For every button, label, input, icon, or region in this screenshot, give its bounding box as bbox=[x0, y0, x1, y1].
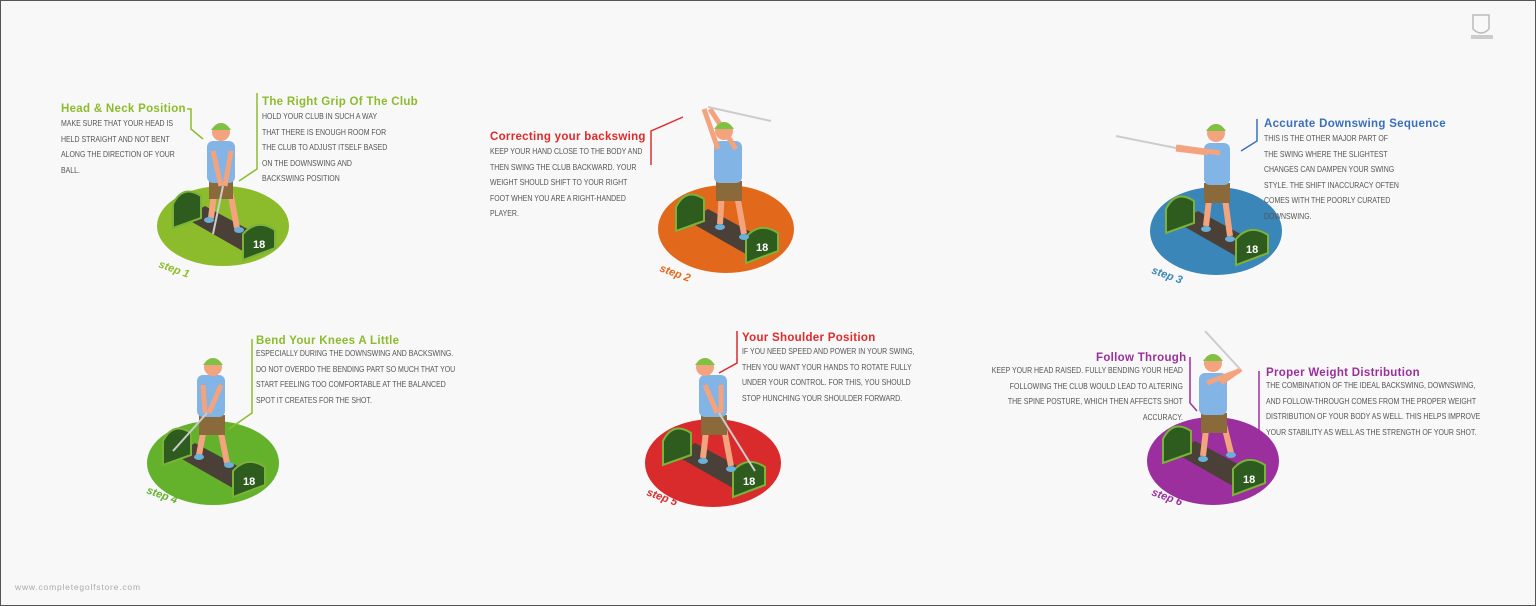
leader lines bbox=[187, 93, 1259, 435]
text: STOP HUNCHING YOUR SHOULDER FORWARD. bbox=[742, 394, 902, 402]
text: DOWNSWING. bbox=[1264, 212, 1312, 220]
footer url: www.completegolfstore.com bbox=[15, 582, 141, 592]
scene: step 1 bbox=[157, 123, 289, 266]
text: backswing: Correcting your backswing bbox=[490, 131, 646, 143]
scene: step 3: 18 bbox=[1246, 244, 1258, 256]
scene: step 1: 18 bbox=[253, 239, 265, 251]
text: UNDER YOUR CONTROL. FOR THIS, YOU SHOULD bbox=[742, 378, 911, 387]
text: THE SPINE POSTURE, WHICH THEN AFFECTS SHOT bbox=[1008, 397, 1183, 406]
text: FOLLOWING THE CLUB WOULD LEAD TO ALTERING bbox=[1010, 382, 1183, 390]
text: THIS IS THE OTHER MAJOR PART OF bbox=[1264, 134, 1388, 143]
text: THE COMBINATION OF THE IDEAL BACKSWING, DOWNSWING, bbox=[1266, 381, 1475, 390]
text: downswing: Accurate Downswing Sequence bbox=[1264, 118, 1446, 130]
scene: step 4 bbox=[147, 358, 279, 505]
text: head & neck: Head & Neck Position bbox=[61, 103, 186, 115]
scene: step 5: 18 bbox=[743, 476, 755, 488]
text: MAKE SURE THAT YOUR HEAD IS bbox=[61, 119, 173, 128]
text: COMES WITH THE POORLY CURATED bbox=[1264, 196, 1390, 205]
text: THEN SWING THE CLUB BACKWARD. YOUR bbox=[490, 162, 636, 172]
text: THE CLUB TO ADJUST ITSELF BASED bbox=[262, 143, 387, 152]
step labels: step 4 bbox=[145, 485, 179, 507]
step labels: step 5 bbox=[645, 487, 680, 509]
text: STYLE. THE SHIFT INACCURACY OFTEN bbox=[1264, 180, 1399, 190]
scene: step 4: 18 bbox=[243, 476, 255, 488]
scene: step 5 bbox=[645, 358, 781, 507]
text: KEEP YOUR HAND CLOSE TO THE BODY AND bbox=[490, 147, 642, 156]
text: BACKSWING POSITION bbox=[262, 174, 340, 183]
text: HELD STRAIGHT AND NOT BENT bbox=[61, 134, 170, 144]
text: weight: Proper Weight Distribution bbox=[1266, 367, 1420, 379]
text: THAT THERE IS ENOUGH ROOM FOR bbox=[262, 128, 386, 136]
scene: step 6: 18 bbox=[1243, 474, 1255, 486]
step labels: step 1 bbox=[157, 259, 191, 281]
text: SPOT IT CREATES FOR THE SHOT. bbox=[256, 396, 372, 404]
text: KEEP YOUR HEAD RAISED. FULLY BENDING YOUR HEAD bbox=[992, 366, 1183, 375]
text: CHANGES CAN DAMPEN YOUR SWING bbox=[1264, 165, 1394, 174]
text: THE SWING WHERE THE SLIGHTEST bbox=[1264, 150, 1388, 158]
text: DO NOT OVERDO THE BENDING PART SO MUCH THAT YOU bbox=[256, 364, 455, 374]
text: shoulder: Your Shoulder Position bbox=[742, 332, 876, 344]
text: THEN YOU WANT YOUR HANDS TO ROTATE FULLY bbox=[742, 362, 912, 372]
text: ALONG THE DIRECTION OF YOUR bbox=[61, 150, 175, 159]
text: ACCURACY. bbox=[1143, 412, 1183, 422]
step labels: step 2 bbox=[658, 263, 692, 285]
text: PLAYER. bbox=[490, 209, 519, 218]
step labels: step 6 bbox=[1150, 487, 1185, 509]
scene: step 6 bbox=[1147, 331, 1279, 505]
text: HOLD YOUR CLUB IN SUCH A WAY bbox=[262, 112, 377, 121]
text: follow through: Follow Through bbox=[1096, 352, 1186, 364]
text: DISTRIBUTION OF YOUR BODY AS WELL. THIS HELPS IMPROVE bbox=[1266, 412, 1480, 421]
text: grip: The Right Grip Of The Club bbox=[262, 96, 418, 108]
text: AND FOLLOW-THROUGH COMES FROM THE PROPER WEIGHT bbox=[1266, 396, 1476, 406]
text: ON THE DOWNSWING AND bbox=[262, 158, 352, 168]
scene: step 3 bbox=[1116, 124, 1282, 275]
text: knees: Bend Your Knees A Little bbox=[256, 335, 399, 347]
text: BALL. bbox=[61, 166, 80, 174]
text: START FEELING TOO COMFORTABLE AT THE BALANCED bbox=[256, 380, 446, 389]
step labels bbox=[145, 259, 1185, 509]
text: IF YOU NEED SPEED AND POWER IN YOUR SWING, bbox=[742, 347, 915, 356]
text: FOOT WHEN YOU ARE A RIGHT-HANDED bbox=[490, 194, 626, 202]
logo bbox=[1471, 15, 1493, 39]
step labels: step 3 bbox=[1150, 265, 1184, 287]
text: ESPECIALLY DURING THE DOWNSWING AND BACKSWING. bbox=[256, 349, 453, 358]
scene: step 2 bbox=[658, 107, 794, 273]
text: WEIGHT SHOULD SHIFT TO YOUR RIGHT bbox=[490, 178, 627, 187]
text: YOUR STABILITY AS WELL AS THE STRENGTH OF YOUR SHOT. bbox=[1266, 428, 1476, 436]
scene: step 2: 18 bbox=[756, 242, 768, 254]
